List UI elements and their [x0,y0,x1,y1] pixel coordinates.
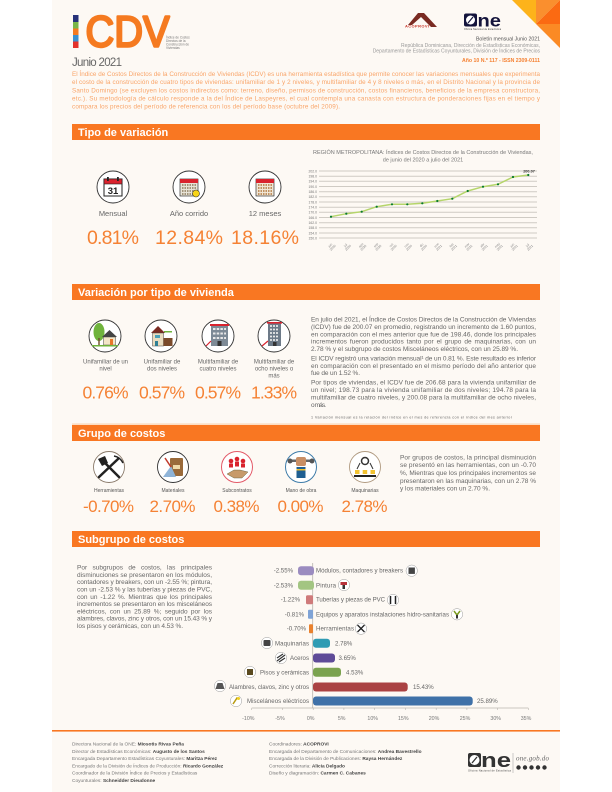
bar values: -1.22% [281,597,301,604]
values: tipos de vivienda: 0.76% [82,382,128,402]
x axis: 25% [460,716,471,722]
text: subgrupos de costos: contadores y breakers, con un -2.55 %; pintura, [77,579,212,586]
footer credits: left: Coordinador de la División Índice de Precios y Estadísticas [72,770,198,777]
text: ICDV description: en comparación con el presentado en el mismo período del año anterior que [311,363,536,370]
text: ICDV description: 2.78 % y el subgrupo de costos Misceláneos eléctricos, con un 25.89 %. [311,346,518,353]
text: grupos de costos [400,454,536,492]
line chart: 200.07 [523,170,535,174]
x axis: 30% [490,716,501,722]
text: ICDV description: un nivel; 198.73 para la vivienda unifamiliar de dos niveles; 194.78 para la [311,387,536,394]
chart title [313,149,533,164]
labels: grupo de costos: Herramientas [94,488,125,494]
footer credits: left [72,742,224,784]
heading: Grupo de costos [72,424,540,441]
labels: grupo de costos: Materiales [161,488,185,494]
logo: ACOPROVI: ACOPROVI [405,24,429,28]
bulletin info [373,36,540,64]
intro text: etc.). Su metodología de cálculo responde a la del Índice de Laspeyres, el cual contempla una canasta con estructura de ponderaciones fijas en el tiempo y [72,94,541,102]
text: grupos de costos: Por grupos de costos, la principal disminución [400,454,536,461]
line chart: 2020 [360,244,368,252]
bar icons [214,565,463,707]
line chart: 202.0 [308,169,317,173]
chart title: de junio del 2020 a julio del 2021 [383,158,463,164]
logo: ONE footer: Oficina Nacional de Estadística [468,768,512,772]
line chart: 2020 [329,244,337,252]
line chart: 182.0 [308,195,317,199]
line chart: 2020 [375,244,383,252]
bar values: -2.53% [274,582,294,589]
heading: Tipo de variación: Tipo de variación [78,127,169,139]
bar labels: Misceláneos eléctricos [247,698,309,705]
text: subgrupos de costos: con un -1.22 %. Mientras que los principales [77,594,213,601]
logo: ICDV: Índice de Costos [166,36,190,40]
bulletin info: Departamento de Estadísticas Coyunturales, División de Índices de Precios [373,48,540,54]
text: grupos de costos: y los materiales con un 2.70 %. [400,486,490,492]
date: Junio 2021: Junio 2021 [72,57,122,69]
labels: tipos de vivienda: ocho niveles o [255,366,294,372]
labels: tipos de vivienda: Multifamiliar de [198,360,239,366]
footer credits: right [269,742,422,777]
labels: grupo de costos: Subcontratos [222,488,252,494]
bar labels: Tuberías y piezas de PVC [316,597,386,604]
logo: ONE footer: one.gob.do [516,754,550,762]
line chart: 2021 [496,244,504,252]
text: ICDV description: multifamiliar de cuatro niveles, y 200.08 para la multifamiliar de ocho niveles, [311,395,536,402]
line chart: jun [327,242,333,248]
x axis [242,708,532,722]
line chart: 174.0 [308,206,317,210]
intro text [72,69,541,110]
text: subgrupos de costos: los pisos y cerámicas, con un 4.53 %. [77,623,183,630]
heading: Variación por tipo de vivienda [72,284,540,300]
footer credits: left: Directora Nacional de la ONE: Miosotis Rivas Peña [72,742,184,748]
text: grupos de costos: se presentó en las herramientas, con un -0.70 [400,462,536,469]
line chart: 2021 [450,244,458,252]
line chart: may [494,242,501,249]
chart title: REGIÓN METROPOLITANA: Índices de Costos Directos de la Construcción de Viviendas, [313,149,533,156]
icon: mensual calendar [97,171,129,203]
labels: tipos de vivienda: Unifamiliar de [144,360,181,366]
labels: tipo de variación: 12 meses [249,209,282,218]
bar labels [229,568,449,705]
labels: tipo de variación: Año corrido [170,209,208,218]
labels: tipos de vivienda: cuatro niveles [199,366,237,372]
x axis: 35% [521,716,532,722]
values: grupo de costos: 2.78% [342,497,388,516]
bar values [274,568,498,705]
logo: ICDV: Construcción de [166,42,189,46]
text: ICDV description: En julio del 2021, el Índice de Costos Directos de la Construcción de Viviendas [311,314,537,324]
bar labels: Alambres, clavos, zinc y otros [229,684,309,691]
bar values: 3.65% [338,655,356,662]
line chart: dic [419,242,424,248]
bars [298,566,473,706]
icon: año corrido calendar [173,171,205,203]
x axis: -10% [242,716,255,722]
labels: grupo de costos [94,488,379,494]
icon: multifamily four levels [202,320,234,352]
line chart: 178.0 [308,200,317,204]
logo: ONE: Oficina Nacional de Estadística [464,28,502,31]
heading: Subgrupo de costos: Subgrupo de costos [78,534,184,546]
line chart: 158.0 [308,226,317,230]
bar values: 2.78% [335,640,353,647]
line chart: feb [449,242,455,248]
text: ICDV description: Por tipos de viviendas, el ICDV fue de 206.68 para la vivienda unifamiliar de [311,380,536,387]
values: tipo de variación: 0.81% [87,227,139,249]
icon: mensual calendar: 31 [108,186,119,197]
logo: ICDV: Viviendas [166,46,180,50]
text: ICDV description: El ICDV registró una variación mensual¹ de un 0.81 %. Este resultado es inferior [311,356,537,363]
bar labels: Pisos y cerámicas [260,669,309,676]
footnote: 1 Variación mensual es la relación del índice en el mes de referencia con el índice del mes anterior [311,416,513,420]
bar labels: Equipos y aparatos instalaciones hidro-sanitarias [316,611,449,618]
values: tipo de variación: 12.84% [155,227,223,249]
labels: tipos de vivienda [83,360,295,380]
line chart: 194.0 [308,180,317,184]
footer credits: right: Corrección literaria: Alicia Delgado [269,763,345,769]
text: ICDV description [311,314,537,409]
line chart: 150.0 [308,236,317,240]
values: tipos de vivienda: 0.57% [139,382,185,402]
icon: materiales [158,452,188,482]
labels: tipos de vivienda: Unifamiliar de un [83,360,128,366]
bar chart: subgrupos [214,563,532,722]
line chart: 190.0 [308,185,317,189]
values: tipo de variación [87,227,299,249]
intro text: El Índice de Costos Directos de la Construcción de Viviendas (ICDV) es una herramienta estadística que permite conocer las variaciones mensuales que experimenta [72,69,540,78]
heading: Tipo de variación [72,124,540,140]
values: grupo de costos [83,497,388,516]
footer credits: right: Encargada de la División de Publicaciones: Raysa Hernández [269,756,403,762]
line chart: mar [464,242,470,249]
logo: ONE footer [468,750,550,773]
text: subgrupos de costos: alambres, clavos, zinc y otros, con un 15.43 % y [77,616,213,623]
line chart: 2021 [526,244,534,252]
line chart: 154.0 [308,231,317,235]
line chart: ago [358,242,364,249]
line chart: nov [403,242,410,249]
labels: grupo de costos: Maquinarias [351,488,379,494]
bulletin info: Año 10 N.º 117 - ISSN 2309-0111 [462,58,540,64]
logo: ONE footer: ne [481,750,511,772]
logo: ICDV: Directos de la [166,39,186,43]
line chart: jul [525,243,530,248]
line chart: sep [373,242,379,249]
footer credits: left: Coyunturales: Schneidder Dieudonne [72,778,156,784]
values: grupo de costos: 2.70% [150,497,196,516]
footer credits: left: Director de Estadísticas Económicas: Augusto de los Santos [72,749,205,755]
labels: tipo de variación [99,209,282,218]
x axis: 20% [429,716,440,722]
line chart: 166.0 [308,216,317,220]
text: subgrupos de costos: con un -2.53 % y las tuberías y piezas de PVC, [77,586,212,594]
values: tipos de vivienda: 0.57% [195,382,241,402]
text: subgrupos de costos: Por subgrupos de costos, las principales [77,564,213,572]
line chart: 2021 [511,244,519,252]
bar values: -2.55% [274,568,294,575]
line chart: jun [509,242,515,248]
icon: 12 meses calendar [249,171,281,203]
text: subgrupos de costos: disminuciones se presentaron en los módulos, [77,572,212,579]
text: ICDV description: en comparación con el mes anterior que fue de 198.46, donde los principales [311,331,537,338]
footer credits: left: Encargada Departamento Estadísticas Coyunturales: Maritza Pérez [72,756,218,762]
values: grupo de costos: 0.00% [278,497,324,516]
line chart: 2021 [481,244,489,252]
bar values: -0.81% [285,611,305,618]
line chart: 2020 [405,244,413,252]
labels: grupo de costos: Mano de obra [286,488,317,494]
labels: tipos de vivienda: nivel [99,366,112,372]
footer credits: right: Coordinadores: ACOPROVI [269,742,329,748]
icon: house two levels [145,320,177,352]
bar labels: Pintura [316,582,337,589]
icon: maquinarias [350,452,380,482]
line chart: jul [343,243,348,248]
bar labels: Módulos, contadores y breakers [316,568,403,575]
line chart: 2021 [435,244,443,252]
text: ICDV description: incrementos fueron producidos tanto por el grupo de maquinarias, con un [311,338,536,346]
logo: ACOPROVI [405,13,437,28]
labels: tipos de vivienda: dos niveles [147,366,177,372]
footer credits: left: Encargado de la División de Índices de Producción: Ricardo González [72,762,224,769]
heading: Subgrupo de costos [72,531,540,547]
line chart: 2020 [344,244,352,252]
bar labels: Aceros [290,655,309,662]
intro text: Santo Domingo (se excluyen los costos indirectos como: terreno, diseño, permisos de construcción, costos financieros, beneficios de la empresa constructora, [72,88,540,94]
text: subgrupos de costos [77,564,213,630]
labels: tipos de vivienda: Multifamiliar de [254,360,295,366]
corner decoration [512,0,560,48]
text: ICDV description: o más. [311,402,326,409]
text: grupos de costos: %, Mientras que los principales incrementos se [400,470,536,477]
footer credits: right: Encargada del Departamento de Comunicaciones: Andrea Bavestrello [269,749,422,755]
text: grupos de costos: presentaron en las maquinarias, con un 2.78 % [400,478,536,485]
line chart: ene [433,242,440,249]
bar values: 4.53% [346,669,364,676]
icon: herramientas [94,452,124,482]
icon: subcontratos [222,452,252,482]
values: grupo de costos: -0.70% [83,497,134,516]
heading: Variación por tipo de vivienda: Variación por tipo de vivienda [78,287,235,299]
logo: ONE [464,10,502,31]
values: tipo de variación: 18.16% [231,227,299,249]
line chart: 162.0 [308,221,317,225]
bar values: -0.70% [287,626,307,633]
values: tipos de vivienda: 1.33% [251,382,297,402]
line chart: 170.0 [308,211,317,215]
bulletin info: Boletín mensual Junio 2021 [476,36,540,42]
logo: ONE: ne [478,10,501,30]
footer credits: right: Diseño y diagramación: Carmen C. Cabanes [269,771,366,777]
line chart: 2020 [420,244,428,252]
x axis: 10% [367,716,378,722]
icon: multifamily eight levels [258,320,290,352]
line chart: 2020 [390,244,398,252]
bar labels: Herramientas [316,626,354,633]
intro text: el costo de la construcción de cuatro tipos de viviendas: unifamiliar de 1 y 2 niveles, y multifamiliar de 4 y 8 niveles o más, en el Distrito Nacional y la provincia de [72,79,540,86]
text: subgrupos de costos: eléctricos, con un 25.89 %; seguido por los [77,608,213,615]
line chart: oct [388,242,394,248]
x axis: 0% [307,716,315,722]
bar values: 15.43% [413,684,434,691]
bar labels: Maquinarias [275,640,309,647]
bar values: 25.89% [477,698,498,705]
logo: ICDV: CDV [86,8,170,57]
text: subgrupos de costos: incrementos se presentaron en los misceláneos [77,601,213,608]
x axis: 5% [338,716,346,722]
line chart: 2021 [466,244,474,252]
line chart: 198.0 [308,174,317,178]
line chart: 186.0 [308,190,317,194]
labels: tipos de vivienda: más [268,374,280,380]
footer rule [52,730,560,732]
labels: tipo de variación: Mensual [99,209,128,218]
intro text: compara los precios del período de referencia con los del período base (octubre del 2009). [72,104,340,110]
text: ICDV description: (ICDV) fue de 200.07 en promedio, registrando un incremento de 1.60 puntos, [311,324,536,331]
heading: Grupo de costos: Grupo de costos [78,428,165,440]
bulletin info: República Dominicana, Dirección de Estadísticas Económicas, [401,43,540,49]
values: grupo de costos: 0.38% [214,497,260,516]
icon: mano de obra [286,452,316,482]
x axis: -5% [275,716,285,722]
values: tipos de vivienda [82,382,297,402]
line chart: abr [479,242,485,248]
icon: house one level [89,320,121,352]
x axis: 15% [398,716,409,722]
line chart [308,149,537,252]
text: ICDV description: fue de un 1.52 %. [311,370,360,377]
